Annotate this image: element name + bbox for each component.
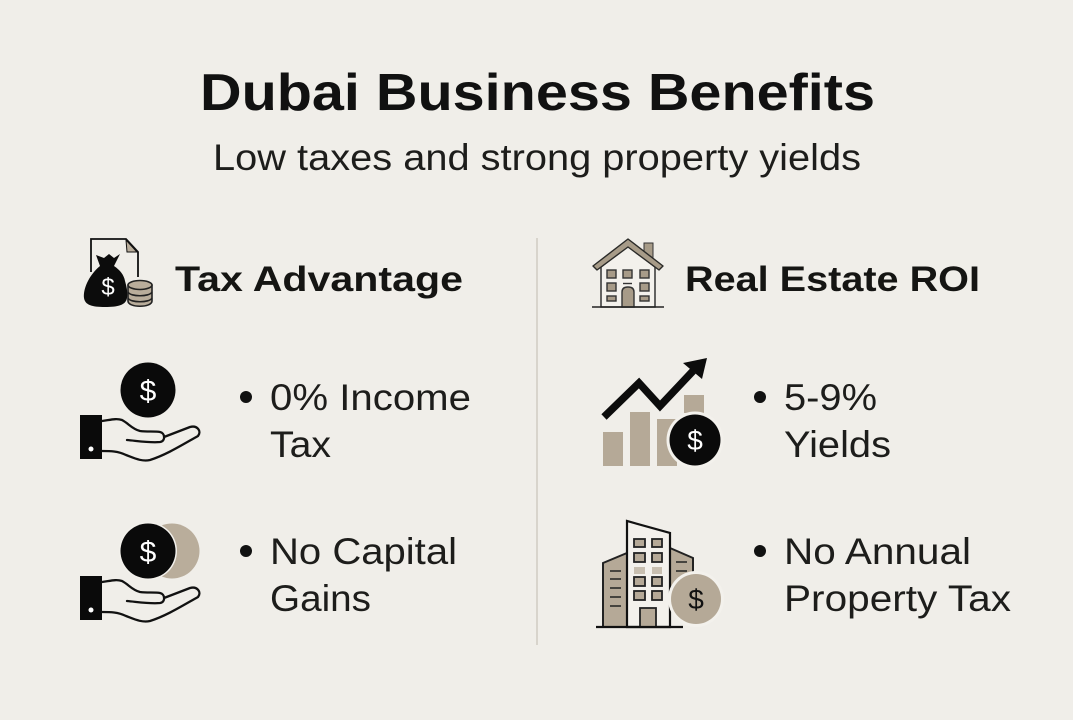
icon: rising chart with coin: $ [687,425,703,456]
icon: rising chart with coin [603,358,724,468]
bullet text: 5-9% yields [754,377,891,465]
icon: office building with coin: $ [688,584,704,615]
heading: real estate roi: Real Estate ROI [685,260,980,299]
icon: hand with dollar coin: $ [140,375,157,408]
title: Dubai Business Benefits [200,64,875,122]
subtitle: Low taxes and strong property yields [213,137,861,178]
bullet text: 5-9% yields: Yields [784,424,891,465]
bullet text: no capital gains [240,531,457,619]
icon: hand with dollar coin [80,362,199,461]
bullet text: no annual property tax: No Annual [784,531,971,572]
panel: real estate roi [592,239,1012,627]
heading: tax advantage: Tax Advantage [175,260,463,299]
icon: hand with two coins [80,522,200,622]
icon: office building with coin [596,521,724,627]
divider [536,238,538,645]
icon: money bag with document and coins [84,239,152,307]
icon: house [592,239,664,307]
bullet text: 0% income tax [240,377,471,465]
bullet text: 0% income tax: Tax [270,424,332,465]
bullet text: no annual property tax: Property Tax [784,578,1012,619]
icon: hand with two coins: $ [140,536,157,569]
panel: tax advantage [80,239,471,622]
icon: money bag with document and coins: $ [101,274,115,301]
bullet text: no capital gains: No Capital [270,531,457,572]
bullet text: 5-9% yields: 5-9% [784,377,877,418]
bullet text: no capital gains: Gains [270,578,371,619]
bullet text: 0% income tax: 0% Income [270,377,471,418]
bullet text: no annual property tax [754,531,1012,619]
